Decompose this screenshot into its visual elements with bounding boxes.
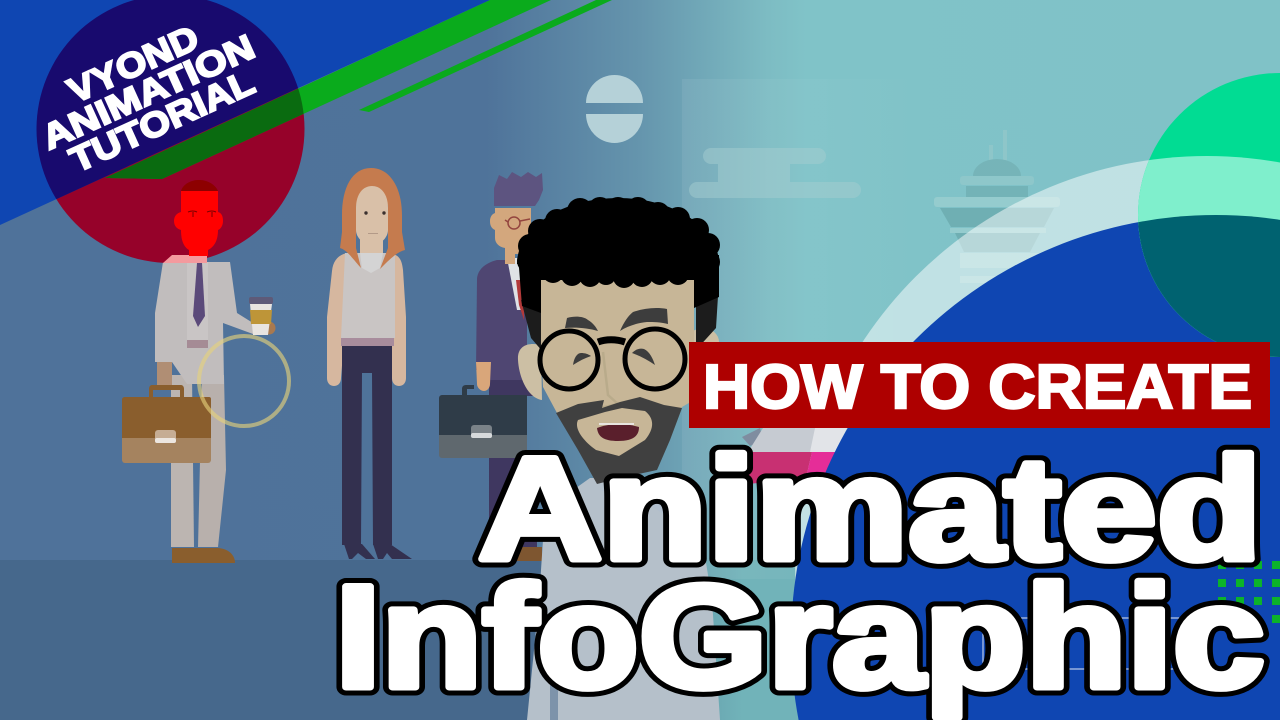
heading: how to create: HOW TO CREATE bbox=[703, 353, 1252, 422]
character: shirt bbox=[527, 478, 720, 720]
coffee cup bbox=[249, 297, 273, 335]
jacket bbox=[155, 262, 253, 384]
eyebrows bbox=[565, 308, 668, 331]
shoes bbox=[172, 548, 235, 563]
face bbox=[356, 186, 388, 245]
person: man with glasses bbox=[439, 172, 543, 561]
background control tower bbox=[934, 130, 1060, 283]
shoulders bbox=[163, 255, 207, 263]
person: red head over badge bbox=[163, 180, 223, 263]
hair bbox=[181, 180, 218, 191]
dark side hair bbox=[521, 296, 718, 352]
badge text: ANIMATION bbox=[36, 27, 261, 158]
background window panel bbox=[682, 79, 922, 579]
hair bbox=[340, 168, 405, 269]
face bbox=[490, 208, 531, 264]
thin data lines bbox=[983, 618, 1195, 669]
neck bbox=[360, 235, 383, 255]
person: man with coffee bbox=[122, 262, 289, 563]
title: animated: Animated bbox=[478, 427, 1262, 590]
trousers bbox=[342, 346, 392, 545]
tie bbox=[193, 263, 205, 327]
heels bbox=[344, 544, 412, 559]
background clouds bbox=[689, 148, 861, 198]
badge: navy overlap bbox=[36, 0, 298, 199]
pink object bbox=[742, 428, 847, 484]
badge text: VYOND bbox=[62, 18, 205, 111]
green thin strip bbox=[359, 0, 612, 112]
neck and face bbox=[174, 191, 223, 256]
yellow ring bbox=[199, 336, 289, 426]
title: animated: Animated bbox=[478, 427, 1262, 590]
floor bbox=[0, 560, 1280, 720]
glasses bbox=[540, 329, 685, 389]
arms bbox=[327, 253, 347, 386]
eyes and mouth bbox=[364, 211, 386, 234]
hand bbox=[476, 362, 491, 391]
badge: red circle bbox=[36, 0, 304, 263]
trousers bbox=[171, 375, 194, 547]
mouth bbox=[597, 424, 639, 441]
coffee hand bbox=[262, 322, 276, 334]
beard bbox=[556, 397, 682, 484]
green dots bbox=[1218, 561, 1280, 623]
blue corner band bbox=[0, 0, 490, 225]
title: infographic: InfoGraphic bbox=[335, 555, 1265, 718]
badge: green overlap bbox=[105, 88, 304, 179]
briefcase bbox=[439, 385, 527, 458]
collar bbox=[360, 253, 383, 273]
hair bbox=[517, 197, 720, 313]
title: infographic: InfoGraphic bbox=[335, 555, 1265, 718]
background round sign bbox=[586, 75, 643, 143]
character: head bbox=[517, 197, 720, 488]
eyes bbox=[188, 211, 216, 217]
belt bbox=[341, 338, 394, 346]
mint circle with overlaps bbox=[1138, 73, 1280, 357]
ears bbox=[518, 344, 542, 400]
belt bbox=[187, 340, 208, 348]
person: woman bbox=[327, 168, 412, 559]
briefcase bbox=[122, 385, 211, 463]
closed eyes bbox=[573, 349, 655, 365]
face bbox=[541, 270, 694, 488]
suit bbox=[476, 260, 527, 380]
big pale ring circle bbox=[795, 156, 1280, 720]
big blue circle bbox=[791, 215, 1280, 720]
shirt and tie bbox=[507, 258, 524, 310]
badge text: TUTORIAL bbox=[64, 63, 260, 180]
green band bbox=[105, 0, 551, 179]
badge text bbox=[36, 18, 261, 180]
glasses bbox=[505, 217, 530, 229]
hair bbox=[494, 172, 543, 206]
top bbox=[341, 253, 395, 338]
shoe bbox=[508, 547, 542, 561]
trousers bbox=[489, 360, 537, 396]
nose lines bbox=[600, 352, 618, 408]
hand at side bbox=[157, 360, 172, 387]
